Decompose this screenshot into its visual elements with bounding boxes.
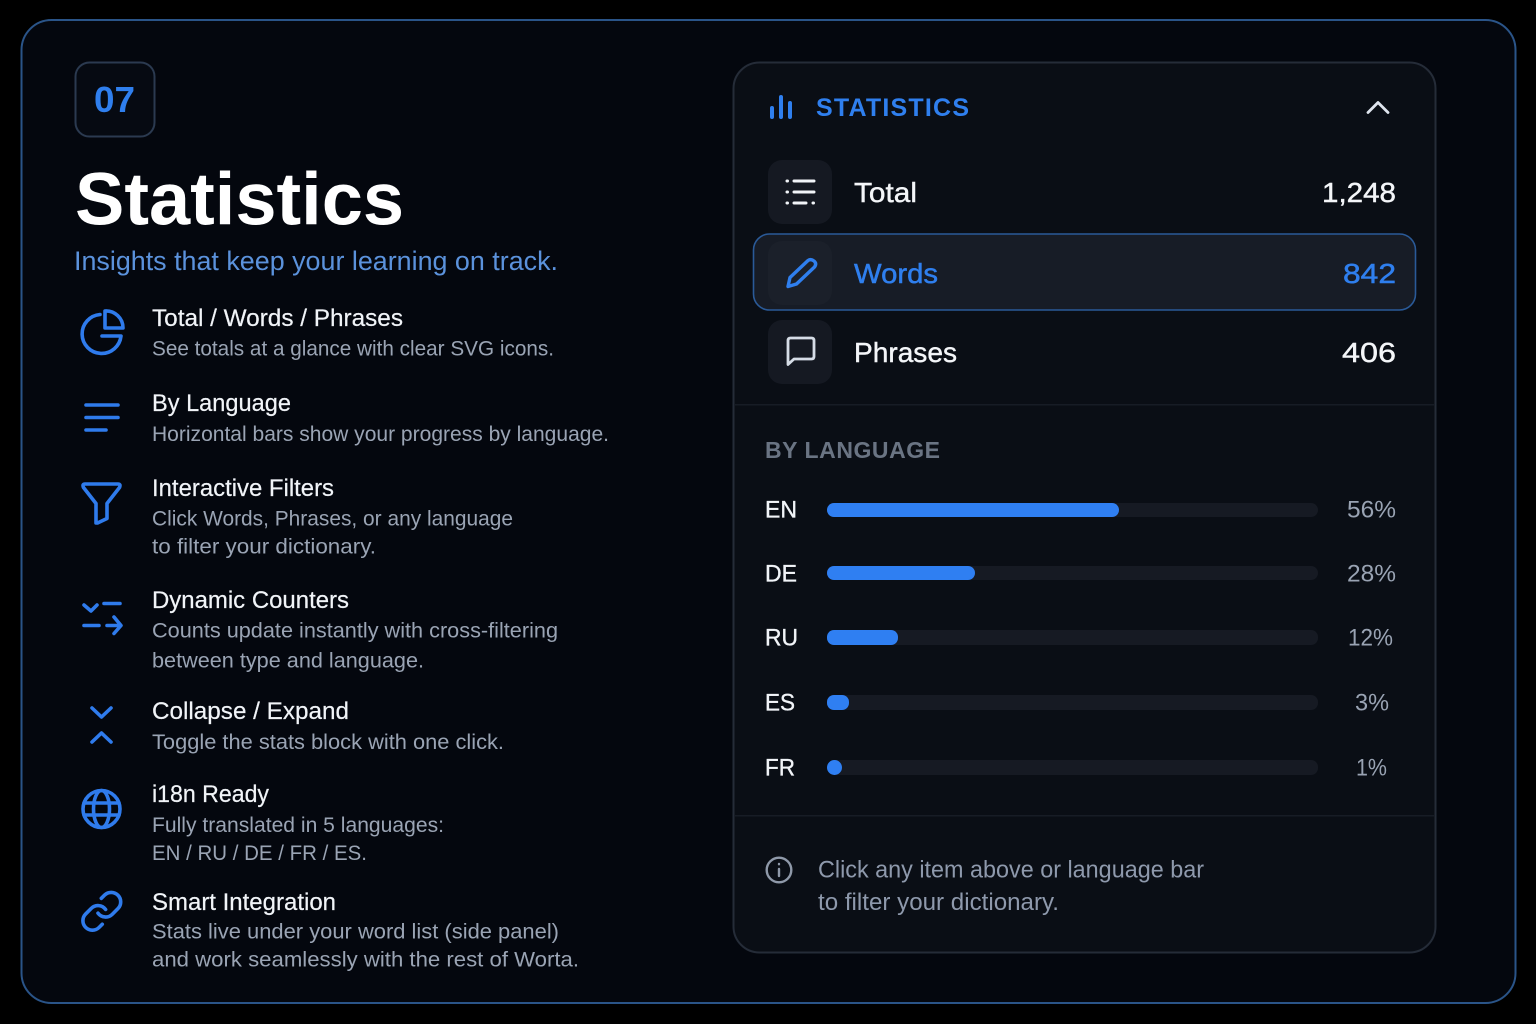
feature: counters (84, 587, 558, 672)
icon: info (767, 858, 791, 882)
feature: by language (86, 390, 609, 446)
icon: link (83, 892, 121, 930)
row: phrases: 406 (1342, 337, 1396, 368)
hint: Click any item above or language bar (818, 856, 1204, 884)
icon: list (787, 181, 814, 203)
bar: FR: 1% (1356, 754, 1387, 782)
panel heading: STATISTICS (816, 94, 969, 122)
icon: counters (84, 604, 121, 634)
feature: integration: Stats live under your word list (side panel) (152, 920, 559, 944)
bar: FR: FR (765, 754, 795, 782)
row: total: 1,248 (1322, 177, 1396, 208)
row: phrases (768, 320, 1396, 384)
bar: DE (765, 560, 1396, 588)
bar: DE: DE (765, 560, 797, 588)
feature: integration: Smart Integration (152, 889, 336, 916)
bar: EN (765, 496, 1396, 524)
feature: i18n (83, 781, 444, 865)
icon: speech bubble (788, 338, 814, 364)
feature: collapse: Toggle the stats block with one click. (152, 730, 504, 754)
section number badge (76, 62, 154, 136)
feature: integration (83, 889, 579, 972)
icon: funnel (83, 484, 120, 523)
bar: ES (765, 690, 1389, 716)
bar: RU: RU (765, 624, 798, 652)
feature: i18n: i18n Ready (152, 781, 269, 808)
bar: EN: EN (765, 496, 797, 524)
icon: bar chart (772, 97, 790, 117)
icon: pie chart (82, 311, 123, 353)
feature: counters: Dynamic Counters (152, 587, 349, 614)
bar: DE: 28% (1347, 560, 1396, 588)
bar: ES: 3% (1355, 690, 1389, 716)
feature: filters: to filter your dictionary. (152, 534, 376, 558)
feature: i18n: EN / RU / DE / FR / ES. (152, 841, 367, 865)
bar: ES: ES (765, 690, 795, 716)
row: words (active) (754, 234, 1416, 310)
feature: collapse (92, 698, 504, 754)
icon: globe (83, 790, 120, 828)
feature: totals (82, 305, 554, 360)
feature: filters: Click Words, Phrases, or any language (152, 506, 513, 530)
feature: filters: Interactive Filters (152, 475, 334, 502)
by language heading: BY LANGUAGE (765, 437, 940, 463)
feature: collapse: Collapse / Expand (152, 698, 349, 725)
feature: counters: Counts update instantly with cross-filtering (152, 618, 558, 642)
hint (767, 856, 1204, 916)
row: words (active): 842 (1343, 258, 1396, 289)
feature: integration: and work seamlessly with the rest of Worta. (152, 948, 579, 972)
bar: RU: 12% (1348, 624, 1393, 652)
feature: by language: Horizontal bars show your progress by language. (152, 422, 609, 446)
icon: chevrons (92, 708, 111, 742)
feature: i18n: Fully translated in 5 languages: (152, 813, 444, 837)
icon: pencil (788, 260, 816, 286)
bar: EN: 56% (1347, 496, 1396, 524)
feature: by language: By Language (152, 390, 291, 417)
row: words (active): Words (854, 258, 938, 289)
bar: RU (765, 624, 1393, 652)
row: total (768, 160, 1396, 224)
bar chart: by language (765, 496, 1396, 782)
feature: totals: See totals at a glance with clear SVG icons. (152, 336, 554, 360)
feature: totals: Total / Words / Phrases (152, 305, 403, 332)
bar: FR (765, 754, 1387, 782)
title: Statistics (75, 158, 404, 240)
row: phrases: Phrases (854, 337, 957, 368)
icon: lines (86, 405, 118, 430)
hint: to filter your dictionary. (818, 889, 1059, 916)
section number badge: 07 (94, 79, 135, 120)
icon: collapse chevron (1368, 102, 1388, 112)
feature: counters: between type and language. (152, 648, 424, 672)
panel: statistics (734, 62, 1436, 952)
row: total: Total (854, 177, 917, 208)
subtitle: Insights that keep your learning on track. (74, 246, 558, 276)
feature: filters (83, 475, 513, 558)
